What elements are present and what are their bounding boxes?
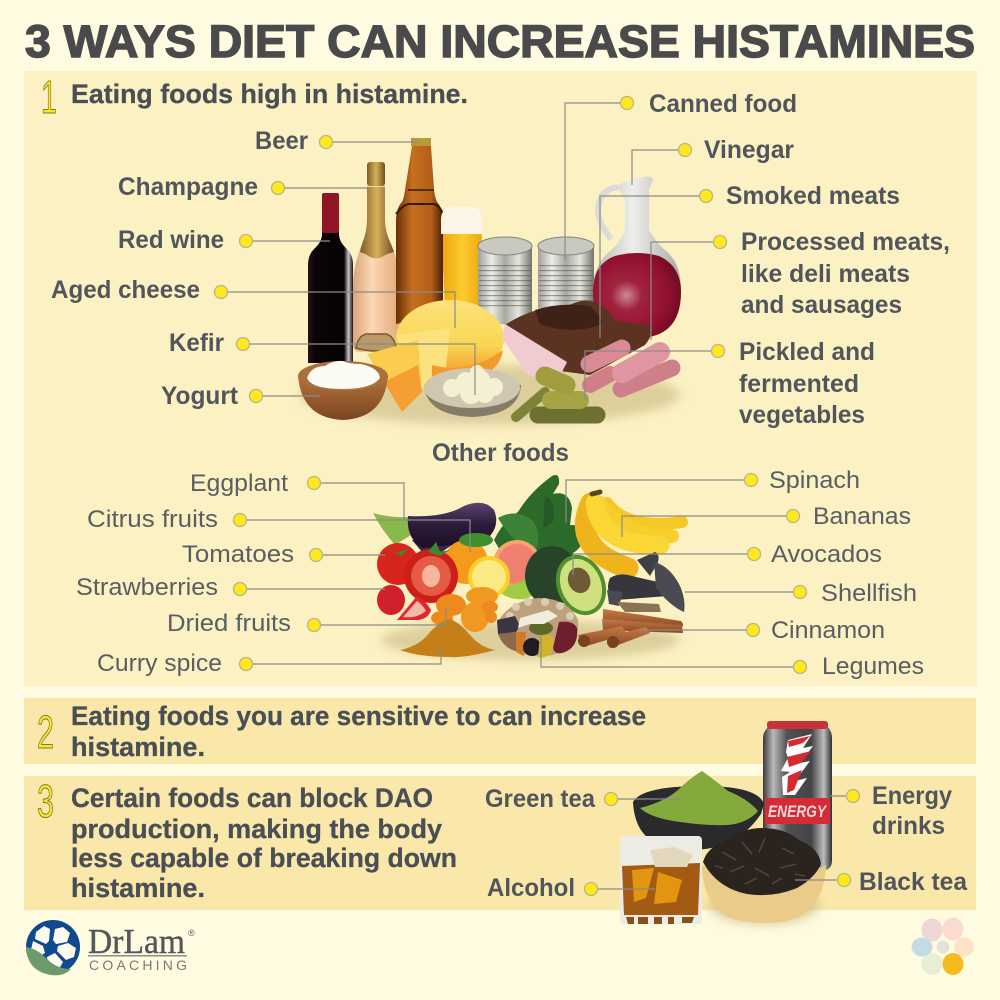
leader lines: panel 1 — [221, 103, 800, 667]
halved avocado — [547, 547, 615, 623]
food labels: high histamine: Pickled and — [739, 338, 875, 366]
orange — [444, 540, 488, 584]
beer bottle — [396, 138, 443, 324]
number 1: 1 — [41, 71, 57, 123]
panel 2 text: histamine. — [71, 732, 205, 762]
title: 3 WAYS DIET CAN INCREASE HISTAMINES — [25, 16, 975, 67]
food labels: panel 3 — [485, 782, 968, 902]
panel 3 text: less capable of breaking down — [71, 843, 457, 873]
food labels: high histamine — [51, 90, 950, 429]
food labels: other foods: Strawberries — [76, 574, 218, 601]
panel 3 text: production, making the body — [71, 814, 442, 844]
tin can right — [538, 237, 594, 316]
curry spice pile — [400, 619, 495, 657]
icon: energy drink can: ENERGY — [768, 802, 827, 821]
red wine bottle — [308, 193, 353, 363]
food labels: high histamine: Processed meats, — [741, 228, 950, 256]
food labels: high histamine: and sausages — [741, 291, 902, 319]
panel 2: sensitive foods — [24, 698, 976, 764]
callout dots: panel 3 — [584, 790, 860, 896]
panel 2 text: Eating foods you are sensitive to can increase — [71, 701, 646, 731]
food labels: other foods: Citrus fruits — [87, 506, 218, 533]
logo wordmark: DrLam — [88, 922, 185, 961]
food labels: high histamine: Kefir — [169, 329, 224, 357]
leaf — [459, 533, 493, 547]
cheese wedge — [367, 340, 422, 412]
pickles — [516, 376, 597, 417]
cinnamon sticks — [578, 609, 683, 648]
callout dots: panel 1 — [214, 96, 806, 674]
yogurt bowl — [298, 361, 388, 420]
icon: energy drink can — [763, 721, 832, 870]
icon: flower watermark — [912, 918, 974, 975]
food labels: other foods: Spinach — [769, 467, 860, 494]
grapefruit — [493, 540, 541, 588]
cured meat — [502, 301, 651, 386]
beer glass — [441, 207, 482, 308]
number 2: 2 — [37, 706, 54, 758]
food labels: other foods: Dried fruits — [167, 610, 291, 637]
food labels: other foods: Eggplant — [190, 470, 288, 497]
food labels: other foods: Bananas — [813, 503, 911, 530]
panel 3 text: histamine. — [71, 873, 205, 903]
icon: whiskey glass — [620, 836, 702, 924]
food labels: other foods: Curry spice — [97, 650, 222, 677]
food labels: other foods: Cinnamon — [771, 617, 885, 644]
food labels: other foods: Legumes — [822, 653, 924, 680]
bananas — [585, 492, 682, 568]
food labels: panel 3: Energy — [872, 782, 952, 810]
food labels: high histamine: Canned food — [649, 90, 797, 118]
food labels: high histamine: Smoked meats — [726, 182, 900, 210]
food labels: high histamine: Beer — [255, 127, 308, 155]
panel 1: foods high in histamine — [24, 71, 977, 686]
food labels: other foods: Avocados — [771, 541, 882, 568]
dried apricots — [431, 587, 498, 632]
other foods heading: Other foods — [432, 439, 569, 467]
logo divider — [88, 955, 187, 956]
logo emblem — [26, 920, 80, 975]
panel 2 text — [71, 701, 646, 762]
logo: DrLam Coaching — [26, 920, 195, 975]
tomatoes — [377, 542, 458, 603]
food labels: other foods: Shellfish — [821, 580, 917, 607]
legumes — [497, 598, 578, 658]
food labels: high histamine: fermented — [739, 370, 859, 398]
icon: black tea bowl — [701, 828, 826, 925]
food labels: high histamine: like deli meats — [741, 260, 910, 288]
shadow — [300, 365, 680, 425]
food labels: high histamine: Red wine — [118, 226, 224, 254]
aged cheese wheel — [396, 300, 504, 388]
mussels — [607, 552, 684, 612]
whole avocado — [525, 546, 579, 606]
food labels: other foods — [76, 467, 924, 680]
food labels: high histamine: Vinegar — [704, 136, 794, 164]
kefir bowl — [424, 365, 521, 417]
vinegar jug — [593, 176, 681, 338]
food labels: panel 3: Black tea — [859, 868, 968, 896]
lime wedge — [497, 578, 537, 599]
food labels: panel 3: drinks — [872, 812, 945, 840]
panel 3 text — [71, 783, 457, 903]
food labels: panel 3: Alcohol — [487, 874, 575, 902]
sausages — [589, 348, 672, 389]
eggplant — [373, 503, 496, 552]
leader lines: panel 3 — [591, 796, 853, 889]
icon: green tea bowl — [633, 771, 764, 850]
food labels: other foods: Tomatoes — [182, 541, 294, 568]
panel 3: DAO blocking foods — [24, 775, 976, 910]
strawberries — [377, 585, 431, 620]
food labels: panel 3: Green tea — [485, 785, 596, 813]
spinach — [494, 475, 585, 570]
shadow — [380, 620, 680, 660]
food labels: high histamine: Yogurt — [161, 382, 239, 410]
lemon — [468, 556, 510, 598]
champagne bottle — [353, 162, 400, 352]
illustration: high histamine foods — [298, 138, 681, 425]
logo tagline: COACHING — [89, 957, 187, 973]
food labels: high histamine: Champagne — [118, 173, 258, 201]
illustration: other foods — [373, 475, 684, 660]
tin can left — [478, 237, 532, 325]
registered mark: ® — [188, 928, 195, 938]
panel 1 heading: Eating foods high in histamine. — [71, 79, 468, 109]
food labels: high histamine: Aged cheese — [51, 276, 200, 304]
panel 3 text: Certain foods can block DAO — [71, 783, 433, 813]
number 3: 3 — [37, 775, 54, 827]
food labels: high histamine: vegetables — [739, 401, 865, 429]
